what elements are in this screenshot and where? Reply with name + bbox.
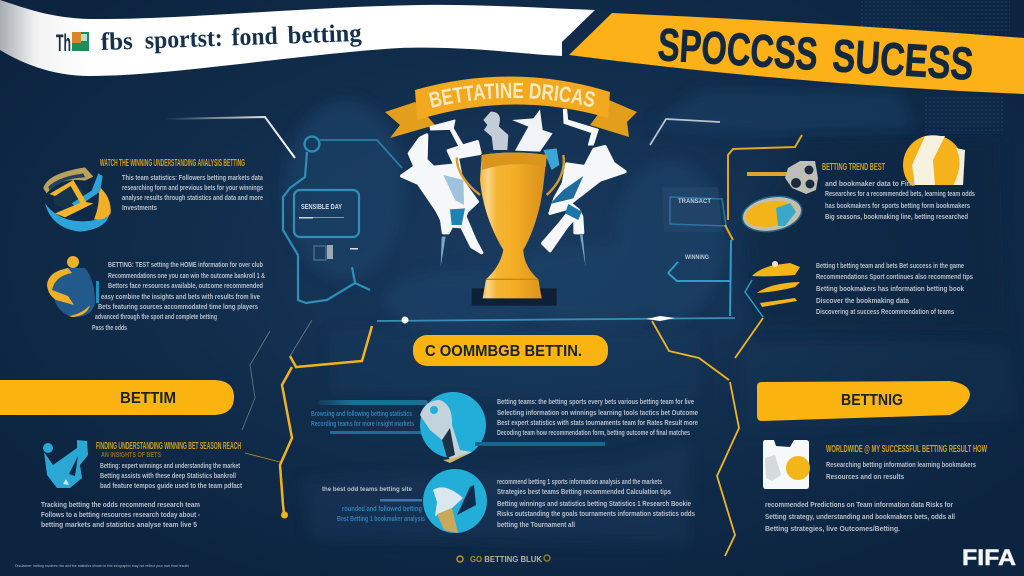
center panel two: text: the best odd teams betting site: [322, 487, 413, 493]
text: left block two: [92, 262, 265, 332]
left device details: [299, 217, 358, 260]
text: center block two: Risks outstanding the goals tournaments information statistics odds: [497, 511, 695, 518]
banner title: fbs: [100, 28, 133, 56]
trophy rim: [482, 152, 547, 170]
top white banner: [0, 0, 595, 76]
left device screen: [294, 190, 359, 237]
text: lower-left footer block: Follows to a betting resources research today about -: [41, 512, 201, 519]
banner title: fond: [231, 23, 278, 51]
text: left block two: Pass the odds: [92, 325, 127, 332]
text: left block one: researching form and previous bets for your winnings: [122, 185, 263, 192]
text: left block two: Recommendations one you can win the outcome bankroll 1 &: [108, 273, 265, 280]
trophy base shadow: [472, 288, 557, 306]
icon: dish: [740, 192, 804, 236]
icon: blue circle two: [423, 469, 487, 533]
text: left block two: BETTING: TEST setting the HOME information for over club: [108, 262, 263, 269]
text: left block two: Bettors face resources available, outcome recommended: [108, 283, 263, 290]
text: right lower block: Resources and on results: [826, 474, 904, 481]
icon: blue circle one: [420, 392, 486, 463]
icon: stacked caps: [752, 261, 800, 307]
gold connector left: [245, 326, 372, 518]
text: right lower block: [826, 462, 976, 481]
text: right block one: Big seasons, bookmaking line, betting researched: [825, 214, 968, 221]
text: right block one: [825, 181, 975, 221]
text: right footer block: recommended Predictions on Team information data Risks for: [765, 502, 953, 509]
pill label: BETTIM: [120, 390, 176, 407]
text: lower-left block: Betting assists with these deep Statistics bankroll: [100, 473, 236, 480]
player left: [402, 120, 482, 253]
heading: lower-left block: [96, 441, 241, 459]
gold connector right: [652, 318, 763, 556]
text: center block one: Selecting information on winnings learning tools tactics bet Outcome: [497, 410, 698, 417]
right device small label: WINNING: [685, 254, 709, 261]
heading: lower-left block: AN INSIGHTS OF BETS: [101, 452, 161, 459]
player center right: [512, 109, 553, 152]
connector white left: [165, 117, 295, 158]
text: right block two: Recommendations Sport continues also recommend tips: [816, 274, 973, 281]
center panel one: bars and text: [311, 400, 428, 434]
center panel one: bars and text: Recording teams for more insight markets: [311, 421, 414, 428]
text: center block one: Decoding team how recommendation form, betting outcome of final matches: [497, 430, 690, 437]
pill label: C OOMMBGB BETTIN.: [425, 343, 582, 360]
trophy handles: [457, 155, 564, 195]
text: right block one: and bookmaker data to Find: [825, 181, 915, 188]
trophy plinth line: [486, 277, 538, 281]
text: left block one: analyse results through statistics and data and more: [122, 195, 263, 202]
text: right block one: has bookmakers for sports betting form bookmakers: [825, 203, 970, 210]
text: lower-left footer block: Tracking betting the odds recommend research team: [41, 502, 200, 509]
right gold connector: [728, 135, 802, 220]
text: right block two: [816, 263, 973, 316]
text: center block two: Strategies best teams Betting recommended Calculation tips: [497, 489, 671, 496]
center ribbon: [385, 76, 637, 138]
dark panel behind right block: [745, 138, 1005, 330]
center panel bar: [475, 442, 605, 446]
text: left block two: easy combine the insights and bets with results from live: [101, 294, 260, 301]
pill: right: [757, 381, 970, 421]
banner title: sportst:: [144, 25, 223, 54]
text: center block one: Betting teams: the betting sports every bets various betting team for live: [497, 399, 694, 406]
text: left block two: advanced through the sport and complete betting: [95, 314, 217, 321]
ribbon title: BETTATINE DRICAS: [428, 82, 595, 108]
FIFA logo: FIFA: [962, 545, 1016, 570]
pill label: BETTNIG: [841, 392, 903, 409]
text: lower-left footer block: betting markets and statistics analyse team live 5: [41, 522, 197, 529]
icon: gold ball: [903, 135, 965, 185]
text: right block two: Discovering at success Recommendation of teams: [816, 309, 954, 316]
text: center block two: Betting winnings and statistics betting Statistics 1 Research Bookie: [497, 501, 691, 508]
logo mark: Th: [56, 30, 71, 57]
banner title: betting: [287, 20, 363, 49]
icon: ring: [43, 167, 111, 232]
dot textures: [860, 0, 1010, 134]
text: right footer block: Setting strategy, understanding and bookmakers bets, odds all: [765, 514, 955, 521]
text: right block two: Discover the bookmaking data: [816, 298, 909, 305]
pill: left betting: [0, 380, 234, 415]
text: center block one: [497, 399, 698, 437]
horizontal divider with highlights: [377, 316, 735, 324]
text: WATCH THE WINNING UNDERSTANDING ANALYSIS BETTING: [100, 158, 245, 169]
left device label: SENSIBLE DAY: [301, 204, 342, 211]
center panel two: text: Best Betting 1 bookmaker analysis: [337, 516, 425, 523]
text: center block two: recommend betting 1 sports information analysis and the markets: [497, 479, 662, 486]
yellow banner: [569, 13, 1024, 94]
text: lower-left footer block: [41, 502, 201, 529]
text: lower-left block: [100, 463, 243, 490]
footnote: Disclaimer: betting involves risk and the statistics shown in this infographic may not reflect your own final results: [15, 564, 189, 568]
text: right block two: Betting t betting team and bets Bet success in the game: [816, 263, 964, 270]
text: center block two: [497, 479, 695, 529]
text: right footer block: [765, 502, 955, 533]
right device label: TRANSACT: [678, 198, 711, 205]
center panel two: text: [322, 487, 425, 523]
connector white right: [650, 119, 720, 145]
trophy cup: [480, 152, 547, 298]
text: lower-left block: Betting: expert winnings and understanding the market: [100, 463, 241, 470]
text: lower-left block: bad feature tempos guide used to the team pdfact: [100, 483, 243, 490]
text: left block one: This team statistics: Followers betting markets data: [122, 175, 263, 182]
yellow banner title: SPOCCSS: [656, 18, 819, 80]
left blue device outline: [283, 136, 402, 303]
text: center block two: betting the Tournament all: [497, 522, 575, 529]
thin grey connector: [242, 320, 312, 430]
text: left block one: [122, 175, 263, 212]
banner title: [100, 20, 363, 56]
text: right block one: Researches for a recommended bets, learning team odds: [825, 191, 975, 198]
icon: blue figure: [43, 440, 88, 488]
crowd silhouettes: [285, 90, 1020, 545]
player center back: [483, 112, 508, 150]
kit accents: [441, 148, 586, 267]
heading: lower-left block: FINDING UNDERSTANDING WINNING BET SEASON REACH: [96, 441, 241, 452]
text: left block two: Bets featuring sources accommodated time long players: [98, 304, 258, 311]
yellow banner title: [656, 18, 975, 90]
text: center block one: Best expert statistics with stats tournaments team for Rates Result more: [497, 420, 698, 427]
text: left block one: Investments: [122, 205, 157, 212]
footer label: GO BETTING BLUK: [470, 555, 542, 564]
icon: white card: [763, 440, 810, 489]
icon: helmet: [47, 256, 99, 317]
player right: [543, 109, 625, 251]
text: right block two: Betting bookmakers has information betting book: [816, 286, 964, 293]
yellow banner title: SUCESS: [831, 29, 975, 90]
center panel one: bars and text: Browsing and following betting statistics: [311, 411, 412, 418]
right blue connector: [668, 225, 763, 317]
center panel two: text: rounded and followed betting: [342, 506, 422, 513]
heading: right block one: BETTING TREND BEST: [822, 162, 885, 173]
icon: lens / whistle: [747, 161, 818, 194]
pill: center: [413, 335, 608, 366]
text: right lower block: Researching betting information learning bookmakers: [826, 462, 976, 469]
trophy and players: [402, 109, 625, 306]
right device screen: [662, 187, 726, 232]
text: right footer block: Betting strategies, live Outcomes/Betting.: [765, 526, 900, 533]
